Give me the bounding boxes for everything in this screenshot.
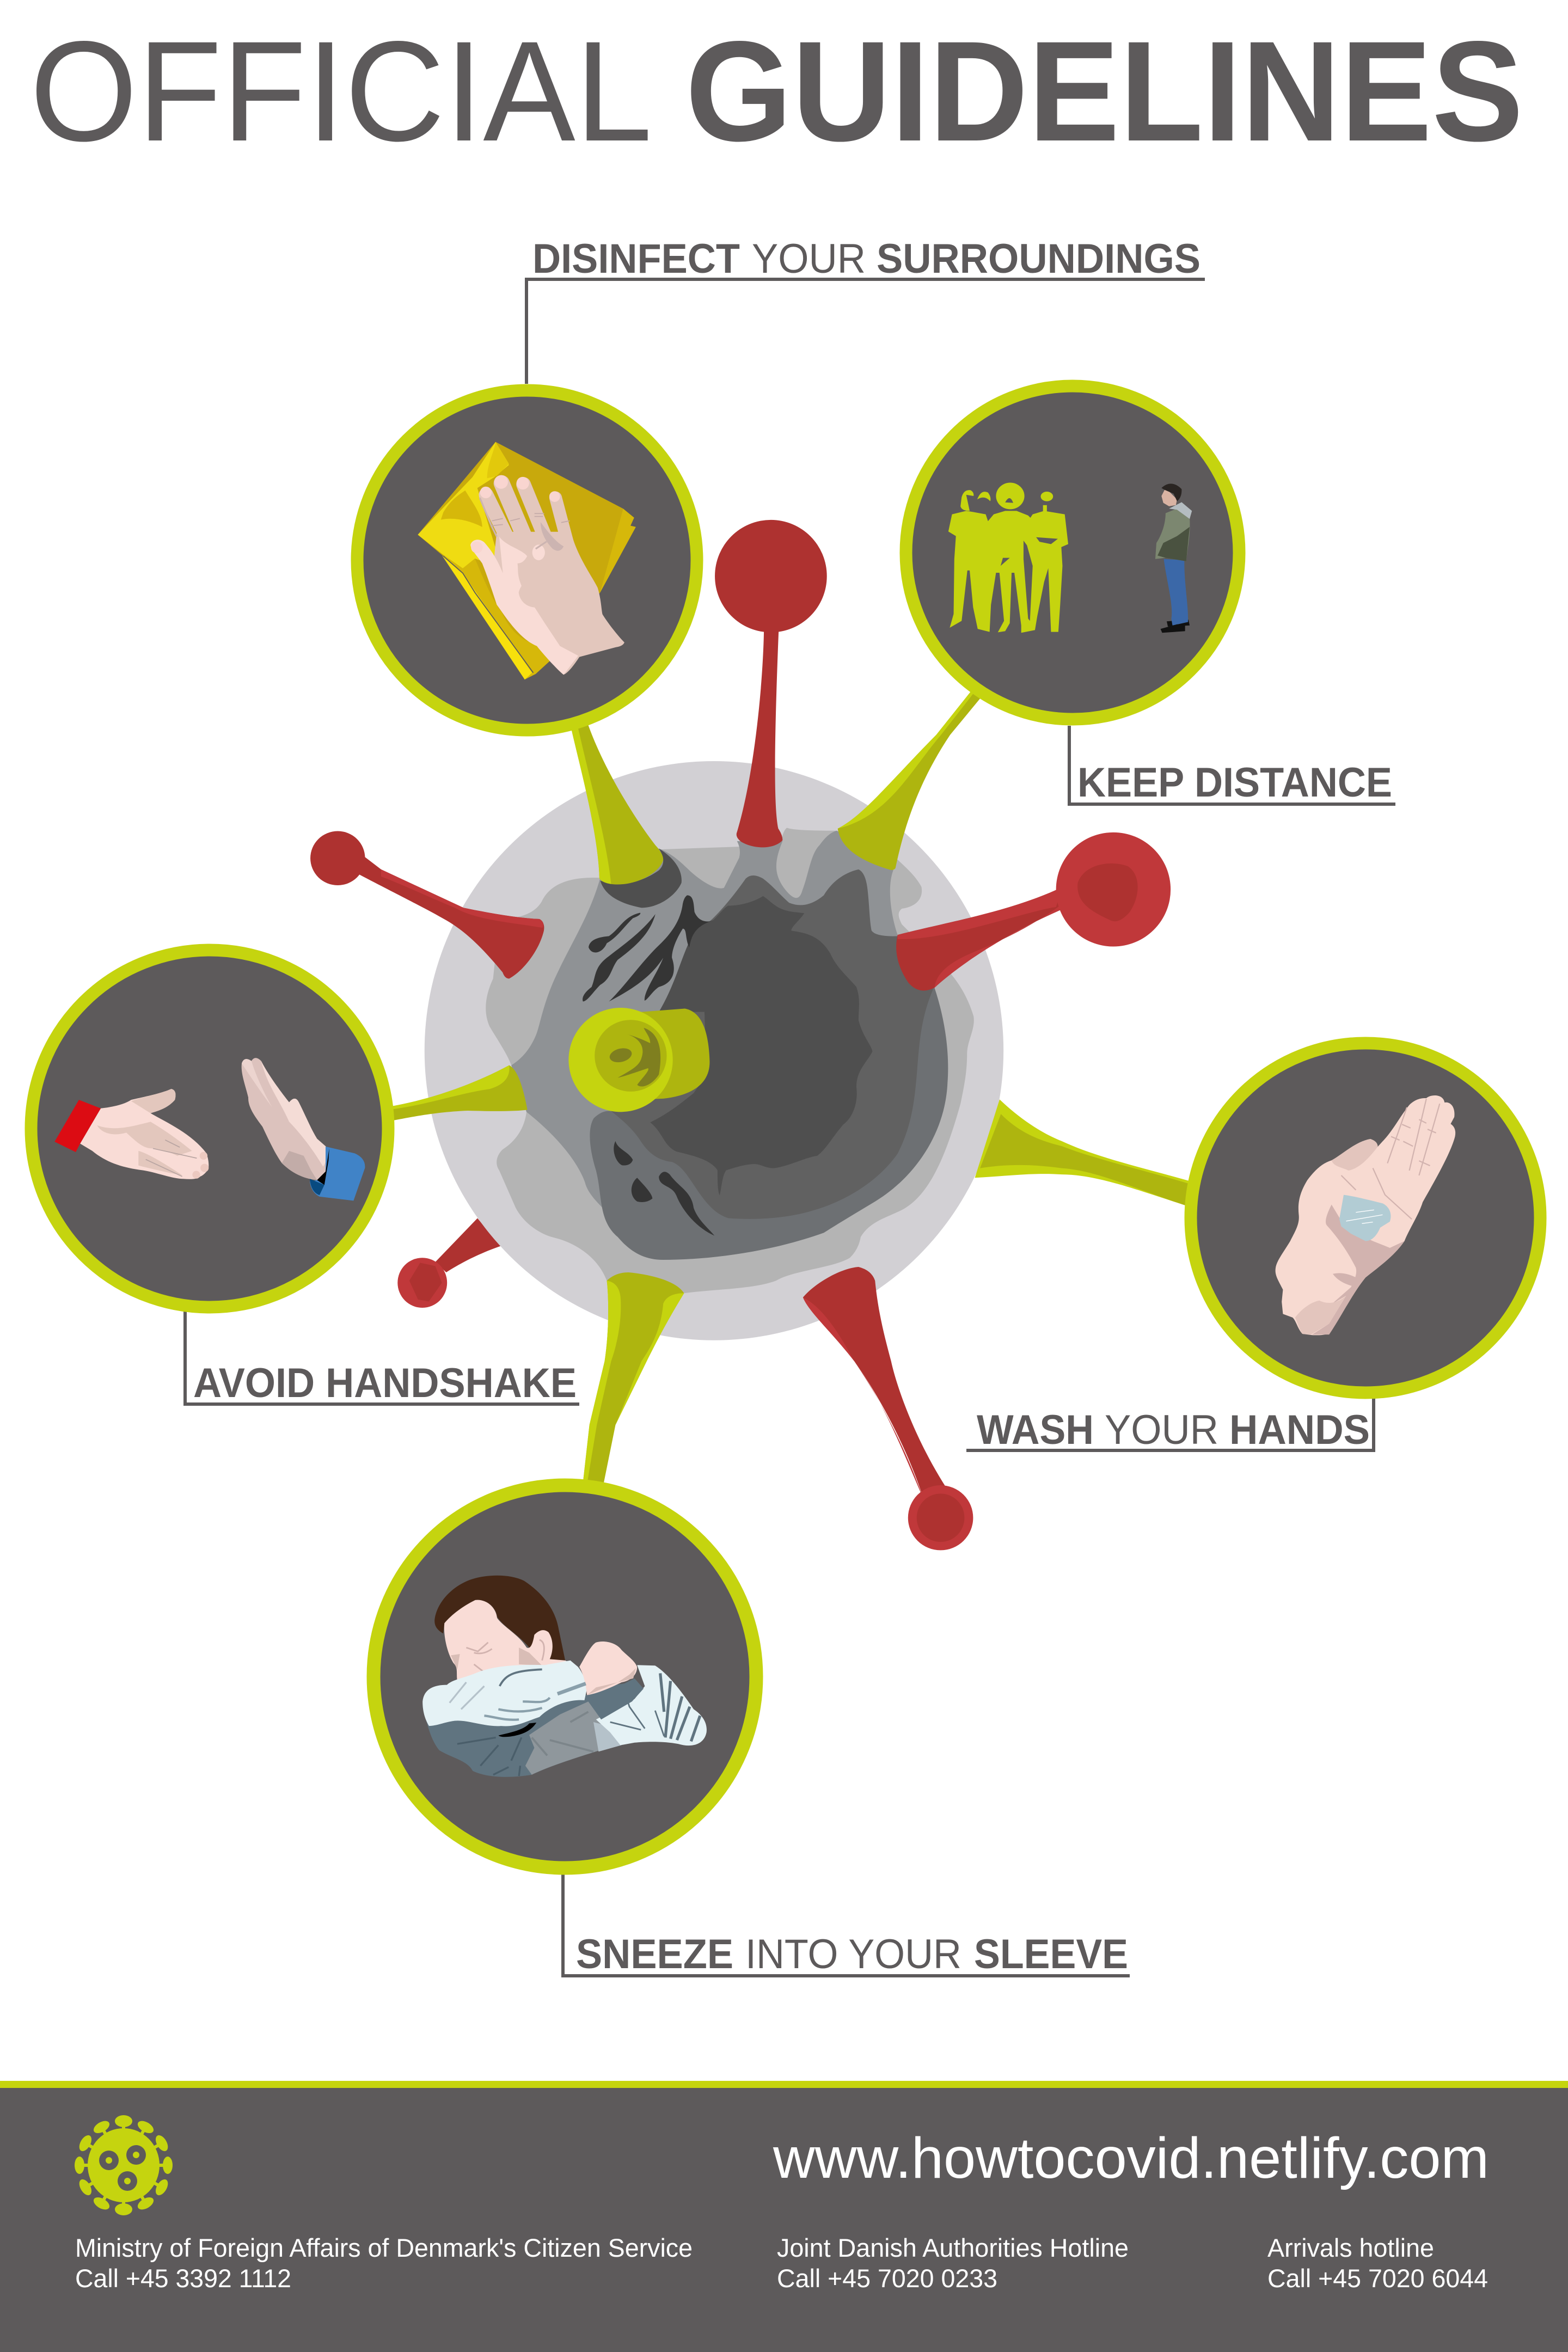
footer background: [0, 2088, 1568, 2352]
virus outer membrane: [425, 761, 1003, 1340]
heading: sneeze into your sleeve: INTO YOUR: [745, 1931, 961, 1977]
icon: hand wiping with cloth: [418, 442, 636, 679]
lime receptor nucleus: [568, 1008, 709, 1112]
lime spike to keep distance: [838, 675, 993, 870]
lime spike to sneeze: [583, 1272, 684, 1483]
connector line: sneeze: [563, 1865, 1130, 1976]
heading: sneeze into your sleeve: [576, 1931, 1128, 1977]
contact: hotline: Call +45 7020 0233: [777, 2264, 997, 2293]
title: OFFICIAL: [30, 11, 652, 171]
connector line: avoid handshake: [185, 1307, 579, 1404]
heading: disinfect your surroundings: DISINFECT: [532, 236, 740, 282]
membrane layer slate grey: [590, 958, 948, 1260]
circle: disinfect: [357, 390, 697, 730]
contact: arrivals: Call +45 7020 6044: [1267, 2264, 1488, 2293]
dark cap: [601, 849, 682, 908]
virus illustration: [310, 520, 1193, 1550]
contact: arrivals: [1267, 2233, 1488, 2293]
contact: ministry: Ministry of Foreign Affairs of Denmark's Citizen Service: [75, 2233, 693, 2262]
red spike bottom-left behind body: [397, 1218, 500, 1308]
red spike bottom: [803, 1267, 973, 1550]
lime spike to disinfect: [571, 722, 663, 885]
footer accent line: [0, 2081, 1568, 2088]
red spike left: [310, 831, 544, 978]
contact: ministry: [75, 2233, 693, 2293]
membrane layer light grey: [486, 828, 974, 1293]
dark surface marks: [583, 895, 714, 1236]
contact: hotline: [777, 2233, 1129, 2293]
heading: keep distance: KEEP DISTANCE: [1077, 759, 1392, 806]
title: GUIDELINES: [685, 11, 1523, 171]
icon: group and lone person apart: [948, 483, 1192, 633]
panel: keep distance: [906, 386, 1395, 806]
lime spike to handshake: [388, 1065, 528, 1122]
heading: wash your hands: WASH: [977, 1407, 1094, 1453]
footer panel: [0, 2081, 1568, 2352]
panel: avoid handshake: [31, 950, 579, 1406]
heading: wash your hands: YOUR: [1105, 1407, 1218, 1453]
connector line: wash your hands: [966, 1394, 1374, 1450]
title: [30, 11, 1523, 171]
icon: palm with soap: [1276, 1095, 1455, 1335]
circle: keep distance: [906, 386, 1239, 719]
circle: sneeze: [373, 1485, 756, 1868]
inner layer dark grey: [611, 869, 933, 1219]
red spike top: [715, 520, 827, 847]
icon: two hands: [54, 1058, 365, 1200]
icon: man sneezing into sleeve: [422, 1576, 707, 1777]
panel: sneeze into your sleeve: [373, 1485, 1130, 1977]
red spike top right: [896, 832, 1171, 990]
virus core: [650, 896, 872, 1195]
lone person: [1155, 483, 1192, 633]
connector line: disinfect: [526, 279, 1205, 384]
group of silhouettes: [948, 483, 1068, 633]
membrane layer mid grey: [511, 831, 934, 1241]
heading: disinfect your surroundings: SURROUNDINGS: [877, 236, 1200, 282]
right hand with blue cuff: [242, 1058, 365, 1200]
panel: disinfect: [357, 236, 1205, 730]
lime spike to wash hands: [975, 1099, 1193, 1208]
heading: avoid handshake: AVOID HANDSHAKE: [193, 1360, 577, 1406]
heading: wash your hands: HANDS: [1229, 1407, 1370, 1453]
heading: disinfect your surroundings: [532, 236, 1200, 282]
heading: disinfect your surroundings: YOUR: [752, 236, 866, 282]
website url: www.howtocovid.netlify.com: [773, 2126, 1489, 2190]
left hand with red cuff: [54, 1089, 209, 1179]
contact: arrivals: Arrivals hotline: [1267, 2233, 1434, 2262]
heading: wash your hands: [977, 1407, 1370, 1453]
circle: wash your hands: [1191, 1043, 1540, 1393]
contact: hotline: Joint Danish Authorities Hotline: [777, 2233, 1129, 2262]
contact: ministry: Call +45 3392 1112: [75, 2264, 291, 2293]
logo: virus icon: [75, 2115, 173, 2215]
circle: avoid handshake: [31, 950, 388, 1307]
panel: wash your hands: [966, 1043, 1540, 1453]
heading: sneeze into your sleeve: SLEEVE: [974, 1931, 1128, 1977]
heading: sneeze into your sleeve: SNEEZE: [576, 1931, 733, 1977]
connector line: keep distance: [1069, 726, 1395, 804]
